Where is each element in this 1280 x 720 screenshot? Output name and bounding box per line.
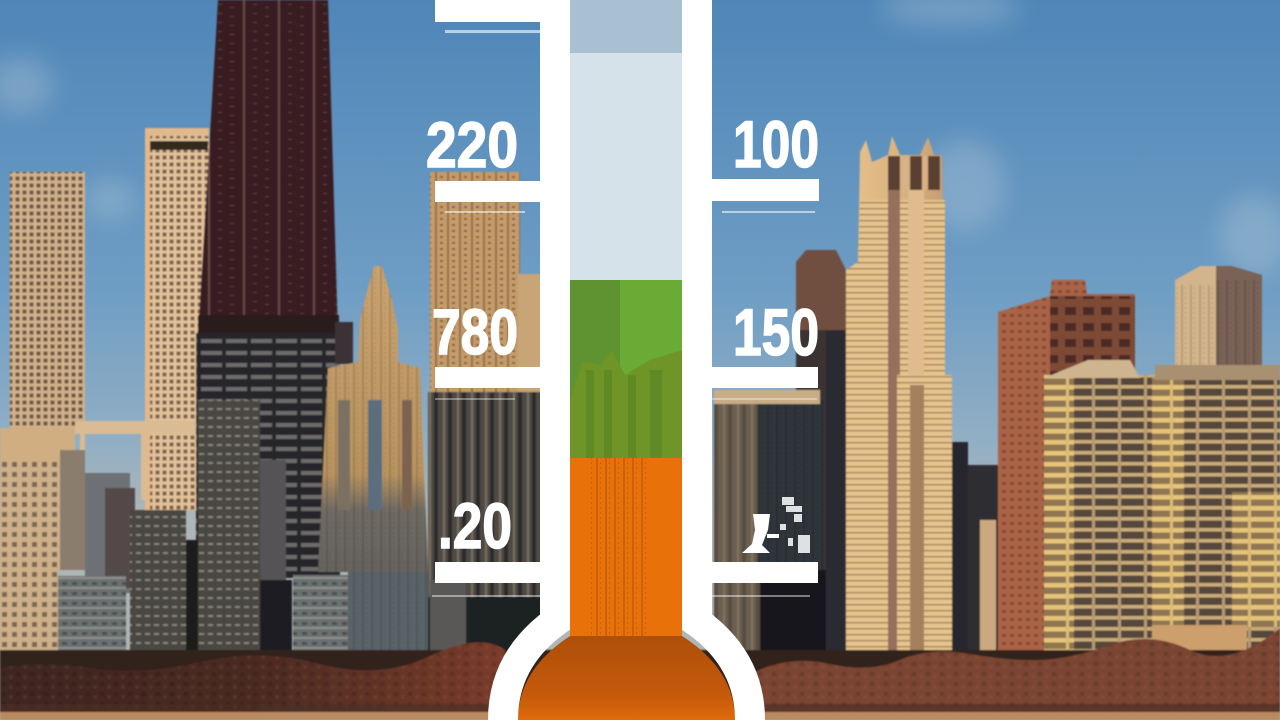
centre-left buildings xyxy=(428,172,542,657)
dark far towers xyxy=(952,442,998,662)
far grey towers, left xyxy=(85,473,135,593)
balcony towers xyxy=(1044,360,1280,660)
garbled label mark xyxy=(742,497,810,553)
low grey buildings xyxy=(293,572,460,663)
thermometer xyxy=(503,0,750,720)
dark tapered skyscraper xyxy=(196,0,353,578)
tube fill: light section xyxy=(570,53,682,280)
pale tower with crown xyxy=(846,136,952,672)
label: .20: .20 xyxy=(438,490,512,562)
thermometer outline xyxy=(503,0,750,720)
label: 150: 150 xyxy=(733,295,819,369)
tan tower A xyxy=(10,172,85,430)
tube fill: orange section xyxy=(570,458,682,636)
brick tower xyxy=(998,280,1135,660)
bulb fill xyxy=(518,636,735,720)
tan tower B xyxy=(145,128,209,510)
ornate tower xyxy=(318,266,428,572)
label: 100: 100 xyxy=(733,107,819,181)
right tick marks xyxy=(711,179,819,597)
left tick marks xyxy=(432,0,541,597)
background: clouds xyxy=(0,0,1280,275)
label: 780: 780 xyxy=(432,296,518,368)
dark tower lower block xyxy=(130,400,292,662)
centre-right buildings xyxy=(714,250,848,662)
tan and brown tower xyxy=(1175,266,1262,385)
bridge between towers xyxy=(75,421,197,500)
trees and shoreline xyxy=(0,628,1280,720)
tube fill: green section xyxy=(570,280,682,458)
tube fill: pale top xyxy=(570,0,682,53)
low left buildings xyxy=(0,428,126,668)
label: 220: 220 xyxy=(426,109,518,181)
